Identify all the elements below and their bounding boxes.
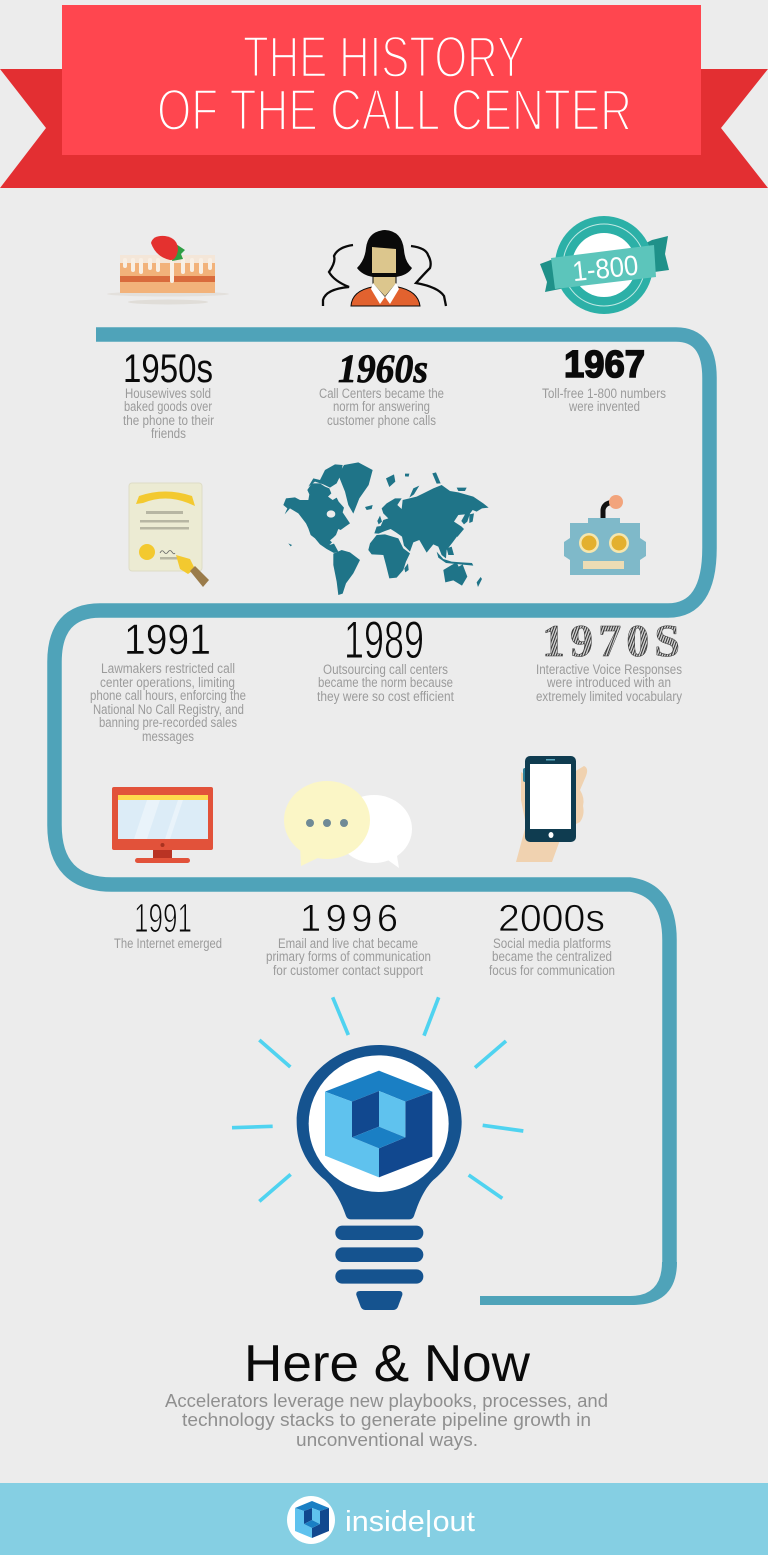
panel: 1967 bbox=[540, 216, 669, 414]
description: 1950s: baked goods over bbox=[124, 399, 212, 414]
icon: chat bubbles bbox=[284, 781, 412, 868]
panel: 1960s bbox=[319, 230, 446, 428]
description: 1991 regulation: National No Call Registry, and bbox=[93, 702, 244, 717]
heading: here and now: Here & Now bbox=[244, 1335, 530, 1393]
icon: insideout logo bbox=[287, 1496, 335, 1544]
panel: 1991 regulation bbox=[90, 483, 246, 744]
year: 1967: 1967 bbox=[564, 344, 645, 386]
description: 1950s: Housewives sold bbox=[125, 386, 211, 401]
description: 1970s: were introduced with an bbox=[546, 675, 671, 690]
icon: world map bbox=[283, 462, 489, 595]
description: 1996 bbox=[266, 936, 431, 978]
description: 1960s bbox=[319, 386, 444, 428]
icon: 1-800 badge bbox=[540, 216, 669, 314]
description: 1989: Outsourcing call centers bbox=[323, 662, 448, 677]
description: 1996: primary forms of communication bbox=[266, 949, 431, 964]
icon: desktop monitor bbox=[112, 787, 213, 863]
description: 2000s bbox=[489, 936, 615, 978]
icon: hand holding phone bbox=[516, 756, 587, 862]
description: 1970s: extremely limited vocabulary bbox=[536, 689, 682, 704]
description: 1950s bbox=[123, 386, 214, 441]
description: 1991 regulation: center operations, limiting bbox=[100, 675, 235, 690]
description: 1991 regulation: phone call hours, enforcing the bbox=[90, 688, 246, 703]
description: 1967: Toll-free 1-800 numbers bbox=[542, 386, 666, 401]
year: 1950s: 1950s bbox=[123, 347, 213, 391]
title: THE HISTORY bbox=[243, 25, 525, 90]
description: 1967 bbox=[542, 386, 666, 414]
text block: here and now bbox=[165, 1391, 608, 1450]
description: 1970s: Interactive Voice Responses bbox=[536, 662, 682, 677]
description: 2000s: Social media platforms bbox=[493, 936, 611, 951]
panel: 1950s bbox=[107, 236, 229, 441]
description: 1960s: norm for answering bbox=[333, 399, 430, 414]
description: 1989: they were so cost efficient bbox=[317, 689, 454, 704]
description: 2000s: became the centralized bbox=[492, 949, 612, 964]
icon: strawberry cake bbox=[107, 236, 229, 304]
text block: here and now: unconventional ways. bbox=[296, 1430, 478, 1450]
description: 2000s: focus for communication bbox=[489, 963, 615, 978]
light rays bbox=[232, 997, 523, 1201]
year: 1989: 1989 bbox=[344, 611, 424, 670]
header banner bbox=[0, 5, 768, 188]
description: 1989: became the norm because bbox=[318, 675, 453, 690]
description: 1996: Email and live chat became bbox=[278, 936, 418, 951]
panel: 2000s bbox=[489, 756, 615, 978]
text block: here and now: technology stacks to generate pipeline growth in bbox=[182, 1410, 591, 1430]
footer bar bbox=[0, 1483, 768, 1555]
icon: 1-800 badge: 1-800 bbox=[571, 250, 640, 287]
panel: 1989 bbox=[283, 462, 489, 704]
year: 1960s: 1960s bbox=[338, 346, 428, 391]
year: 1991: 1991 bbox=[124, 616, 211, 664]
description: 1996: for customer contact support bbox=[273, 963, 423, 978]
description: 1991 regulation: messages bbox=[142, 729, 194, 744]
year: 1970s: 1970S bbox=[542, 615, 680, 666]
logo wordmark: inside|out bbox=[345, 1506, 475, 1538]
description: 1991 regulation: banning pre-recorded sales bbox=[99, 715, 237, 730]
description: 1970s bbox=[536, 662, 682, 704]
icon: light bulb with cube bbox=[232, 997, 523, 1310]
text block: here and now: Accelerators leverage new playbooks, processes, and bbox=[165, 1391, 608, 1411]
icon: certificate bbox=[129, 483, 209, 587]
description: 1960s: Call Centers became the bbox=[319, 386, 444, 401]
title: OF THE CALL CENTER bbox=[157, 78, 632, 143]
panel: 1996 bbox=[266, 781, 431, 978]
panel: 1991 internet bbox=[112, 787, 222, 951]
description: 1960s: customer phone calls bbox=[327, 413, 436, 428]
description: 1991 regulation bbox=[90, 661, 246, 744]
description: 1989 bbox=[317, 662, 454, 704]
description: 1991 internet: The Internet emerged bbox=[114, 936, 222, 951]
title bbox=[157, 25, 632, 143]
description: 1950s: friends bbox=[151, 426, 186, 441]
icon: call center agents bbox=[323, 230, 446, 306]
panel: 1970s bbox=[536, 495, 682, 704]
icon: robot bbox=[564, 495, 646, 575]
description: 1950s: the phone to their bbox=[123, 413, 214, 428]
timeline path bbox=[54, 334, 710, 1305]
year: 1996: 1996 bbox=[300, 898, 398, 940]
description: 1991 regulation: Lawmakers restricted call bbox=[101, 661, 235, 676]
year: 1991 thin: 1991 bbox=[134, 895, 192, 941]
year: 2000s: 2000s bbox=[498, 898, 605, 940]
description: 1967: were invented bbox=[568, 399, 640, 414]
